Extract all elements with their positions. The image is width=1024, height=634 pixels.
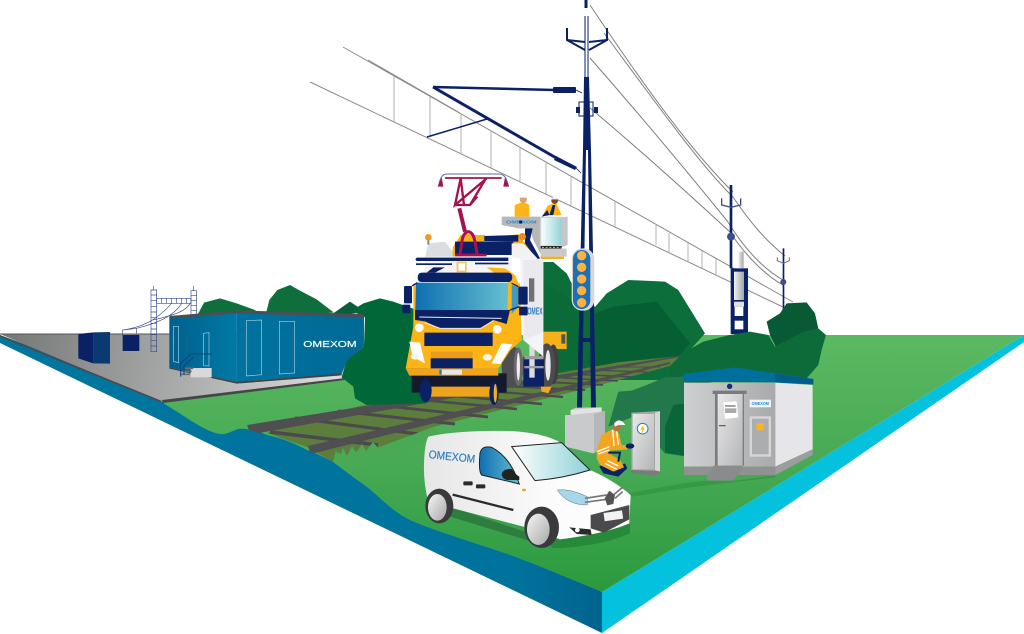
van logo: OMEXOM — [428, 449, 476, 466]
building walls — [169, 313, 237, 382]
van seat headrest — [502, 469, 519, 480]
kiosk walls — [684, 383, 775, 467]
white box body: OMEX — [527, 306, 543, 317]
van shadow — [450, 507, 630, 548]
signal lights — [572, 248, 594, 311]
ground: grass field — [163, 335, 1024, 592]
sun visor and roof bars — [415, 258, 512, 282]
overhead line: feeder wires — [590, 5, 785, 285]
kiosk steps — [707, 466, 743, 481]
base: left blue edge — [0, 335, 602, 633]
van rear wheel — [425, 489, 453, 523]
rail guide wheels — [420, 379, 499, 405]
van body — [424, 431, 631, 539]
gantry structure — [123, 286, 197, 352]
bushes behind the transformer kiosk — [608, 302, 826, 457]
roof equipment — [425, 228, 540, 273]
tree behind signal post — [543, 262, 705, 380]
bumper and plate — [406, 368, 507, 393]
third pole — [777, 248, 789, 312]
white box body — [512, 242, 543, 357]
pantograph — [438, 174, 509, 255]
grille — [415, 323, 502, 369]
van front bumper — [569, 505, 629, 535]
entrance steps — [181, 354, 212, 377]
container — [78, 332, 110, 364]
van side window — [479, 447, 519, 484]
signal base block — [565, 407, 605, 453]
lower windscreen panel — [415, 310, 510, 329]
wheels front — [502, 347, 524, 388]
roof edge — [169, 310, 364, 319]
grass tufts by the track — [333, 427, 440, 470]
van headlight — [557, 490, 587, 505]
kiosk logo plate — [750, 400, 771, 407]
headlights — [409, 342, 512, 364]
van — [424, 431, 631, 548]
cab shoulder — [487, 267, 521, 288]
trees behind the substation building — [198, 285, 365, 317]
ground: grey platform — [0, 334, 345, 404]
transformer kiosk — [623, 367, 813, 497]
lift basket — [502, 217, 568, 259]
side window — [512, 285, 518, 314]
technician — [597, 420, 634, 477]
kiosk logo plate: OMEXOM — [752, 401, 769, 406]
kiosk shadow — [623, 475, 775, 497]
overhead line: catenary wires and droppers — [310, 47, 793, 307]
van door handles and rub strip — [453, 481, 526, 510]
base: right cyan edge — [602, 335, 1024, 633]
doors and windows — [173, 320, 295, 376]
windshield — [415, 283, 508, 311]
rear axle and chassis — [523, 332, 567, 393]
substation building — [78, 286, 364, 384]
kiosk panel — [750, 416, 771, 457]
kiosk door — [713, 384, 747, 466]
lift basket: OMEXOM — [506, 219, 537, 224]
lift workers — [515, 195, 562, 217]
transformer box — [123, 335, 139, 351]
van front wheel — [524, 507, 559, 548]
trees left of the truck — [342, 298, 427, 405]
mirrors — [402, 283, 528, 315]
cab front — [406, 283, 522, 368]
railway track — [247, 356, 680, 462]
second pole with insulator — [722, 185, 748, 334]
kiosk roof — [683, 367, 813, 384]
logo on the building: OMEXOM — [303, 340, 357, 349]
road-rail truck — [402, 174, 568, 405]
van windscreen — [512, 443, 590, 481]
cantilever brackets — [427, 87, 582, 173]
van grille and badge — [585, 487, 623, 505]
main mast — [567, 0, 607, 408]
charging cabinet — [631, 411, 660, 476]
